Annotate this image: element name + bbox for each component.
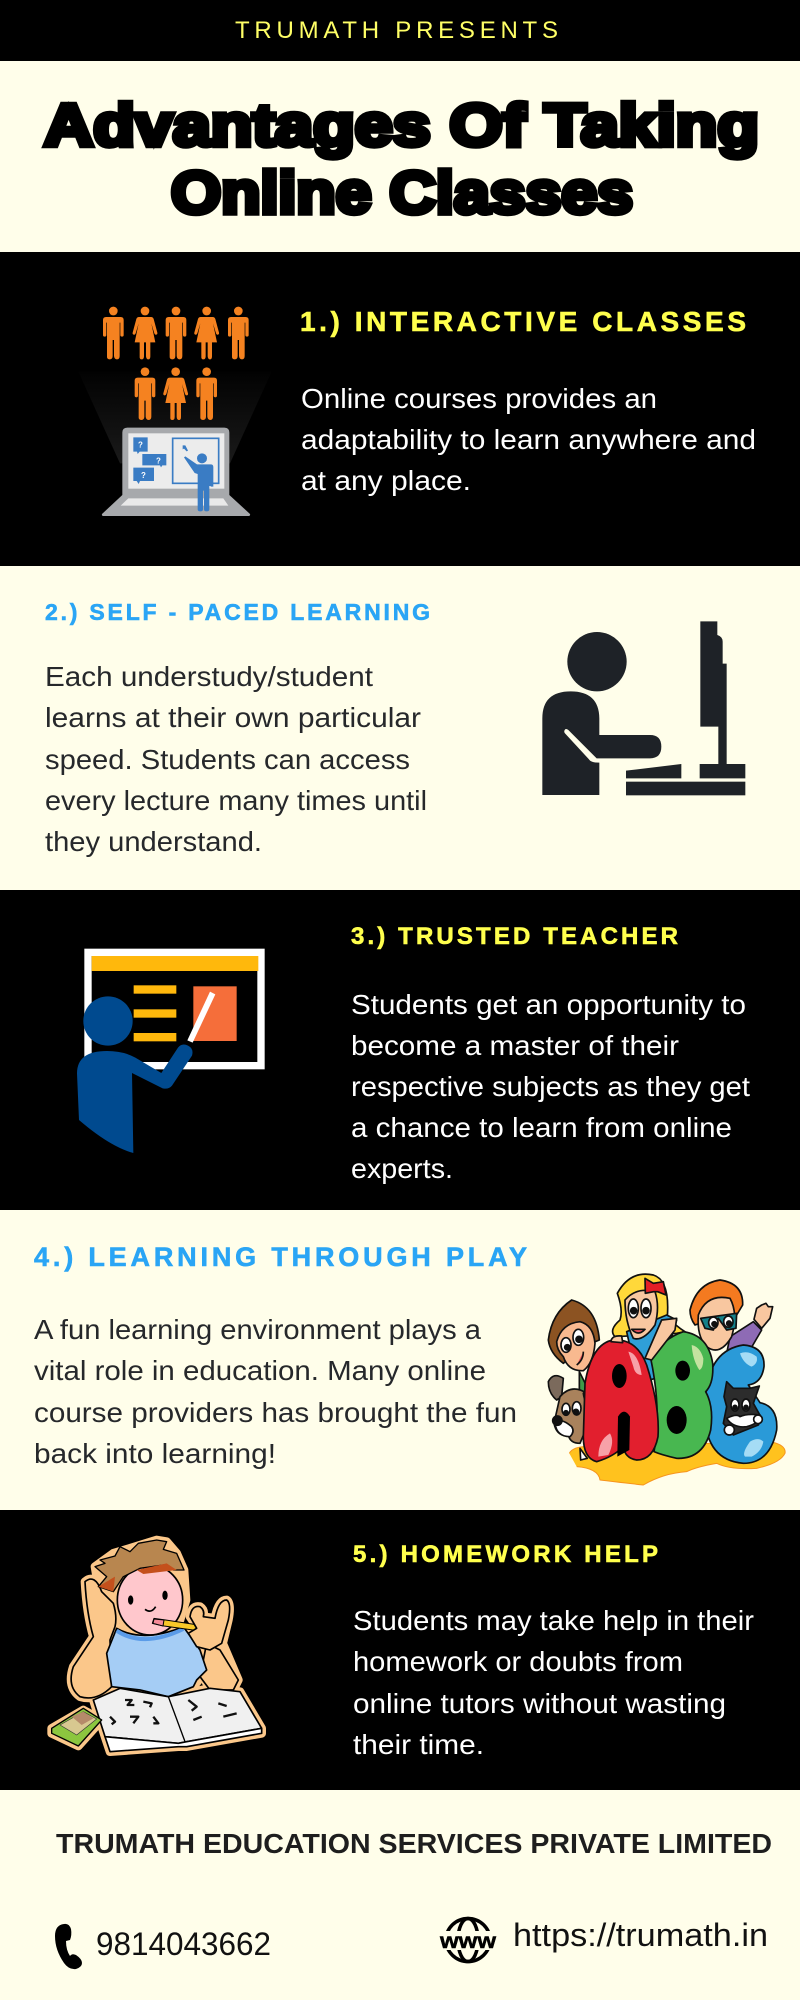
text block: adaptability to learn anywhere and	[301, 424, 756, 455]
pencil	[152, 1618, 221, 1632]
face	[117, 1565, 183, 1635]
text block: their time.	[353, 1729, 484, 1760]
letter C	[705, 1345, 777, 1463]
shirt	[107, 1627, 207, 1697]
text block	[34, 1314, 517, 1469]
panel: footer	[0, 1790, 800, 2000]
company name: TRUMATH EDUCATION SERVICES PRIVATE LIMITED	[56, 1828, 772, 1859]
text block: learns at their own particular	[45, 702, 421, 733]
text block: online tutors without wasting	[353, 1688, 726, 1719]
heading: 2.) SELF - PACED LEARNING	[45, 599, 430, 625]
text block: A fun learning environment plays a	[34, 1314, 481, 1345]
panel: self-paced learning	[0, 566, 800, 890]
heading: 3.) TRUSTED TEACHER	[351, 923, 678, 950]
icon: teacher at board	[77, 952, 261, 1153]
top banner	[0, 0, 800, 61]
hair	[95, 1540, 184, 1592]
text block: Students get an opportunity to	[351, 989, 746, 1020]
icon: person at computer	[542, 621, 745, 795]
icon: students and laptop: ?	[141, 471, 146, 480]
boy left	[579, 1372, 589, 1398]
girl arm	[645, 1318, 677, 1360]
right forearm	[200, 1643, 238, 1690]
text block: at any place.	[301, 465, 471, 496]
panel: trusted teacher	[0, 890, 800, 1210]
title panel	[0, 61, 800, 252]
left arm and hand	[71, 1579, 116, 1698]
panel: homework help	[0, 1510, 800, 1790]
banner text: TRUMATH PRESENTS	[235, 17, 558, 44]
text block: speed. Students can access	[45, 744, 410, 775]
text block: a chance to learn from online	[351, 1112, 732, 1143]
calculator	[52, 1708, 102, 1746]
icon: www globe	[438, 1918, 498, 1962]
heading: 1.) INTERACTIVE CLASSES	[300, 306, 746, 337]
letter B	[651, 1332, 713, 1458]
text block: they understand.	[45, 826, 262, 857]
icon: boy studying	[52, 1540, 262, 1752]
text block: respective subjects as they get	[351, 1071, 750, 1102]
text block: course providers has brought the fun	[34, 1397, 517, 1428]
text block	[45, 661, 427, 857]
letter A	[583, 1340, 658, 1462]
text block: back into learning!	[34, 1438, 276, 1469]
title: Advantages Of Taking	[44, 92, 759, 158]
title	[44, 92, 759, 226]
icon: students and laptop: ?	[156, 456, 161, 465]
icon: phone	[55, 1924, 82, 1969]
text block: homework or doubts from	[353, 1646, 683, 1677]
text block: experts.	[351, 1153, 453, 1184]
text block: Each understudy/student	[45, 661, 373, 692]
icon: students and laptop: ?	[138, 440, 143, 449]
website: https://trumath.in	[513, 1917, 768, 1953]
girl	[613, 1274, 685, 1337]
text block: Students may take help in their	[353, 1605, 754, 1636]
heading: 5.) HOMEWORK HELP	[353, 1541, 658, 1568]
text block: every lecture many times until	[45, 785, 427, 816]
panel: learning through play	[0, 1210, 800, 1510]
heading: 4.) LEARNING THROUGH PLAY	[34, 1242, 527, 1272]
text block: become a master of their	[351, 1030, 679, 1061]
text block	[353, 1605, 754, 1760]
icon: ABC kids illustration	[548, 1274, 785, 1485]
phone number: 9814043662	[96, 1926, 271, 1962]
text block: vital role in education. Many online	[34, 1355, 486, 1386]
text block: Online courses provides an	[301, 383, 657, 414]
text block	[351, 989, 750, 1184]
title: Online Classes	[171, 160, 633, 226]
book	[93, 1688, 262, 1743]
text block	[301, 383, 756, 496]
boy right	[727, 1322, 762, 1353]
cat	[723, 1382, 762, 1435]
raised hand	[188, 1600, 230, 1650]
icon: www globe: www	[439, 1930, 497, 1953]
sticker outline	[52, 1540, 262, 1752]
icon: students and laptop	[78, 307, 272, 516]
dog	[548, 1376, 563, 1400]
panel: interactive classes	[0, 252, 800, 566]
